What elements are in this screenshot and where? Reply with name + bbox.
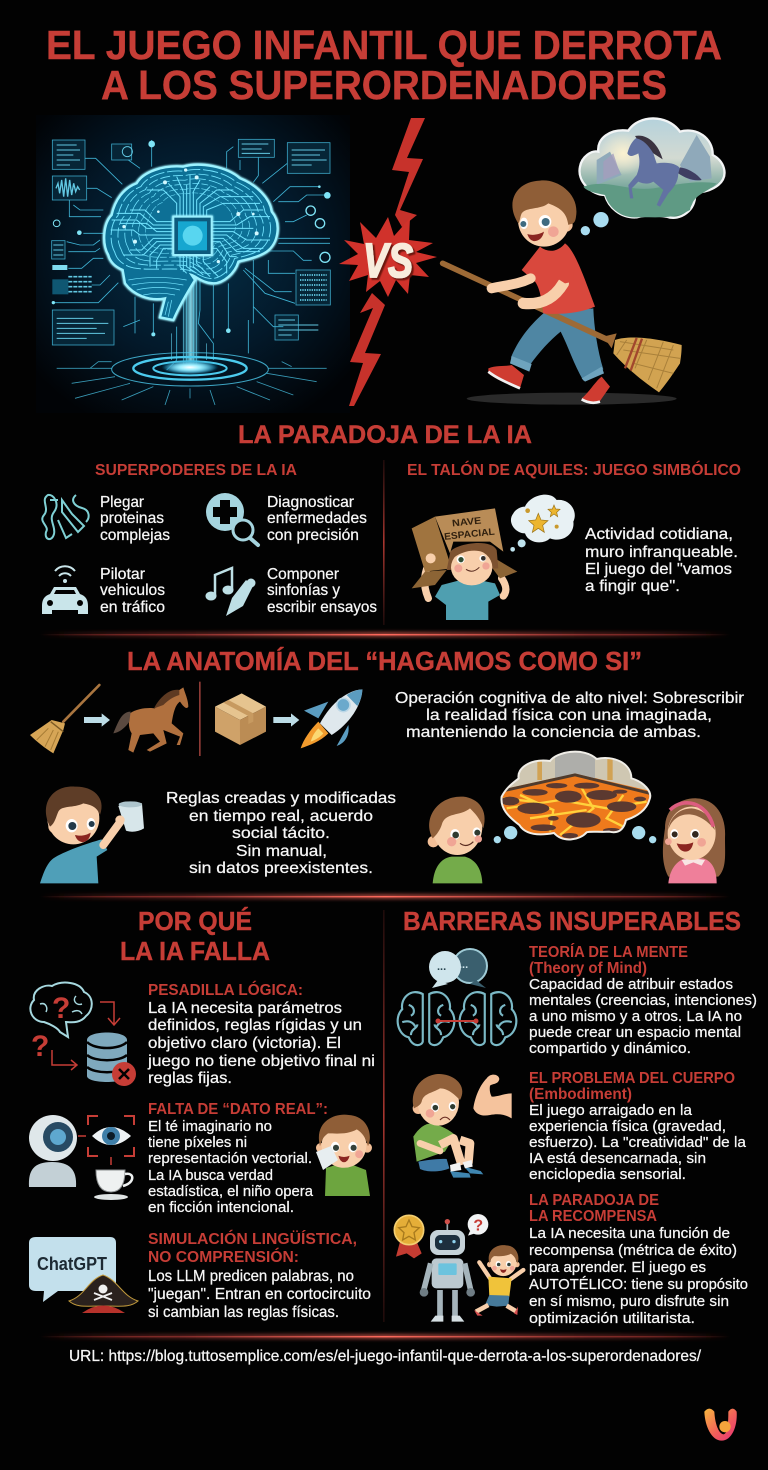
text: lack of real data: La IA busca verdad bbox=[148, 1167, 273, 1184]
text: logic nightmare: PESADILLA LÓGICA: bbox=[148, 980, 303, 999]
logo bbox=[704, 1409, 737, 1441]
text: theory of mind: (Theory of Mind) bbox=[529, 960, 647, 977]
text: diagnose: Diagnosticar bbox=[267, 494, 355, 511]
text: everyday wall bbox=[585, 526, 738, 595]
text: lack of real data: FALTA DE “DATO REAL”: bbox=[148, 1101, 328, 1118]
text: logic nightmare: definidos, reglas rígidas y un bbox=[148, 1017, 362, 1034]
icon: protein bbox=[42, 495, 89, 539]
section heading: anatomy: LA ANATOMÍA DEL “HAGAMOS COMO SI” bbox=[127, 646, 642, 676]
arms bbox=[492, 278, 531, 288]
text: body problem: IA está desencarnada, sin bbox=[529, 1150, 706, 1167]
text: body problem: experiencia física (gravedad, bbox=[529, 1118, 726, 1135]
icon: music and pen bbox=[206, 568, 255, 616]
text: body problem: enciclopedia sensorial. bbox=[529, 1166, 686, 1183]
title: A LOS SUPERORDENADORES bbox=[101, 62, 667, 108]
icon: medal bbox=[394, 1215, 424, 1258]
text: fold proteins: complejas bbox=[100, 527, 170, 544]
text: linguistic simulation: "juegan". Entran en cortocircuito bbox=[148, 1286, 371, 1303]
icon: robot bbox=[420, 1219, 475, 1322]
heading: why AI fails: LA IA FALLA bbox=[120, 936, 270, 966]
icon: flexed arm bbox=[473, 1075, 512, 1118]
broom stick bbox=[443, 263, 608, 340]
text: body problem bbox=[529, 1070, 747, 1183]
icon: ChatGPT bubble bbox=[29, 1237, 116, 1302]
text: theory of mind: mentales (creencias, intenciones) bbox=[529, 992, 757, 1009]
icon: tea cup bbox=[94, 1170, 132, 1200]
text: theory of mind bbox=[529, 942, 757, 1057]
text: compose: Componer bbox=[267, 566, 340, 583]
box label bbox=[444, 515, 495, 543]
text: body problem: El juego arraigado en la bbox=[529, 1102, 693, 1119]
icon: cardboard box bbox=[215, 693, 266, 745]
text: linguistic simulation: Los LLM predicen palabras, no bbox=[148, 1268, 354, 1285]
circuit connectors bbox=[53, 140, 330, 370]
text: linguistic simulation: SIMULACIÓN LINGÜÍSTICA, bbox=[148, 1229, 357, 1248]
text: cognitive operation: manteniendo la conciencia de ambas. bbox=[406, 724, 701, 741]
transformation icons bbox=[30, 682, 362, 756]
text: reward paradox: La IA necesita una función de bbox=[529, 1225, 730, 1242]
brain traces bbox=[111, 169, 271, 317]
text: theory of mind: compartido y dinámico. bbox=[529, 1040, 691, 1057]
icon: ChatGPT bubble: ChatGPT bbox=[37, 1254, 107, 1274]
head bbox=[512, 180, 576, 247]
icon: chat bubbles: ... bbox=[437, 961, 446, 973]
title bbox=[46, 22, 722, 108]
text: reward paradox bbox=[529, 1192, 748, 1327]
data beam bbox=[182, 277, 200, 368]
broom head bbox=[603, 333, 617, 348]
shoes bbox=[488, 365, 524, 388]
thought cloud with stars bbox=[510, 495, 575, 552]
icon: pirate hat bbox=[69, 1275, 138, 1313]
text: logic nightmare bbox=[147, 980, 375, 1087]
text: rules: Sin manual, bbox=[236, 843, 327, 860]
girl in pink bbox=[663, 798, 725, 883]
text: logic nightmare: La IA necesita parámetros bbox=[148, 1000, 342, 1017]
text: reward paradox: LA PARADOJA DE bbox=[529, 1192, 659, 1209]
jeans bbox=[511, 308, 603, 381]
text: everyday wall: a fingir que". bbox=[585, 578, 680, 595]
icon: question bubble: ? bbox=[473, 1218, 483, 1235]
text: lack of real data: representación vectorial. bbox=[148, 1150, 312, 1167]
boy riding a broom with thought cloud bbox=[443, 118, 724, 405]
embodiment and reward figures bbox=[394, 1074, 523, 1322]
panel text lines bbox=[53, 144, 327, 338]
text: lack of real data: estadística, el niño opera bbox=[148, 1183, 314, 1200]
text: rules: Reglas creadas y modificadas bbox=[166, 790, 396, 807]
text: everyday wall: Actividad cotidiana, bbox=[585, 526, 733, 543]
icon: broom bbox=[30, 685, 99, 753]
text: pilot: Pilotar bbox=[100, 566, 146, 583]
text: theory of mind: puede crear un espacio mental bbox=[529, 1024, 741, 1041]
lightning bolt bbox=[349, 118, 425, 406]
text: cognitive operation bbox=[395, 690, 745, 741]
VS badge bbox=[339, 217, 437, 297]
text: reward paradox: en sí mismo, puro disfrute sin bbox=[529, 1293, 729, 1310]
text: rules: sin datos preexistentes. bbox=[189, 860, 373, 877]
source URL: URL: https://blog.tuttosemplice.com/es/el-juego-infantil-que-derrota-a-los-superordenadores/ bbox=[69, 1348, 702, 1365]
arrow bbox=[273, 713, 299, 727]
text: reward paradox: recompensa (métrica de éxito) bbox=[529, 1242, 737, 1259]
text: body problem: (Embodiment) bbox=[529, 1086, 632, 1103]
red shirt bbox=[522, 243, 595, 314]
text: theory of mind: TEORÍA DE LA MENTE bbox=[529, 942, 688, 961]
heading: achilles heel: EL TALÓN DE AQUILES: JUEGO SIMBÓLICO bbox=[407, 460, 741, 479]
heading: why AI fails bbox=[120, 906, 270, 966]
text: diagnose: enfermedades bbox=[267, 510, 367, 527]
brain bbox=[104, 165, 278, 320]
text: pilot: en tráfico bbox=[100, 599, 165, 616]
text: theory of mind: a uno mismo y a otros. La IA no bbox=[529, 1008, 742, 1025]
box label: ESPACIAL bbox=[444, 527, 495, 543]
boy in green bbox=[428, 797, 485, 883]
text: body problem: esfuerzo). La "creatividad" de la bbox=[529, 1134, 747, 1151]
lava cloud bbox=[494, 745, 656, 845]
horse bbox=[627, 136, 702, 207]
text: diagnose bbox=[267, 494, 367, 544]
arrow bbox=[84, 713, 110, 727]
icon: brain, database and error bbox=[30, 983, 136, 1086]
icon: medical magnifier bbox=[206, 493, 258, 545]
VS badge: VS bbox=[363, 235, 413, 288]
text: everyday wall: El juego del "vamos bbox=[585, 561, 732, 578]
text: reward paradox: LA RECOMPENSA bbox=[529, 1208, 657, 1225]
text: reward paradox: optimización utilitarista. bbox=[529, 1310, 695, 1327]
text: linguistic simulation: si cambian las reglas físicas. bbox=[148, 1304, 339, 1321]
heading: superpowers: SUPERPODERES DE LA IA bbox=[95, 462, 297, 479]
text: fold proteins bbox=[100, 494, 170, 544]
text: cognitive operation: la realidad física con una imaginada, bbox=[426, 707, 712, 724]
heading: insurmountable barriers: BARRERAS INSUPERABLES bbox=[403, 906, 741, 936]
text: theory of mind: Capacidad de atribuir estados bbox=[529, 976, 733, 993]
chip bbox=[173, 217, 212, 255]
boy drinking bbox=[316, 1115, 372, 1196]
text: compose bbox=[267, 566, 377, 616]
text: lack of real data: tiene píxeles ni bbox=[148, 1134, 247, 1151]
text: rules bbox=[166, 790, 396, 877]
text: compose: sinfonías y bbox=[267, 582, 340, 599]
box label: NAVE bbox=[452, 515, 483, 529]
text: fold proteins: proteinas bbox=[100, 510, 164, 527]
sad boy sitting bbox=[413, 1074, 483, 1178]
icon: two brains bbox=[398, 992, 516, 1045]
text: pilot: vehiculos bbox=[100, 582, 165, 599]
child with cardboard box bbox=[412, 508, 517, 620]
icon: chat bubbles bbox=[429, 949, 487, 988]
icon: brain, database and error: ? bbox=[52, 992, 70, 1025]
icon: question bubble bbox=[468, 1214, 488, 1236]
text: body problem: EL PROBLEMA DEL CUERPO bbox=[529, 1070, 735, 1087]
icon: robot and eye bbox=[29, 1115, 134, 1187]
text: lack of real data: El té imaginario no bbox=[148, 1118, 272, 1135]
ground shadow bbox=[467, 393, 677, 405]
icon: horse bbox=[113, 687, 188, 753]
text: reward paradox: AUTOTÉLICO: tiene su propósito bbox=[529, 1276, 748, 1293]
text: logic nightmare: objetivo claro (victoria). El bbox=[148, 1035, 341, 1052]
hologram base bbox=[57, 353, 327, 405]
text: logic nightmare: juego no tiene objetivo final ni bbox=[147, 1053, 375, 1070]
text: everyday wall: muro infranqueable. bbox=[585, 544, 738, 561]
title: EL JUEGO INFANTIL QUE DERROTA bbox=[46, 22, 722, 68]
text: rules: social tácito. bbox=[232, 825, 330, 842]
text: pilot bbox=[100, 566, 165, 616]
text: linguistic simulation: NO COMPRENSIÓN: bbox=[148, 1247, 299, 1266]
text: lack of real data bbox=[148, 1101, 328, 1216]
text: rules: en tiempo real, acuerdo bbox=[189, 808, 373, 825]
text: compose: escribir ensayos bbox=[267, 599, 377, 616]
text: reward paradox: para aprender. El juego es bbox=[529, 1259, 706, 1276]
thought cloud with horse bbox=[580, 118, 724, 235]
heading: why AI fails: POR QUÉ bbox=[138, 906, 252, 936]
panel: AI circuit brain bbox=[36, 115, 350, 413]
section heading: paradox: LA PARADOJA DE LA IA bbox=[238, 421, 532, 449]
boy with cup bbox=[40, 787, 144, 883]
icon: rocket bbox=[301, 689, 362, 748]
text: fold proteins: Plegar bbox=[100, 494, 145, 511]
text: lack of real data: en ficción intencional. bbox=[148, 1199, 294, 1216]
lava thought scene bbox=[428, 745, 725, 883]
text: diagnose: con precisión bbox=[267, 527, 359, 544]
text: linguistic simulation bbox=[148, 1229, 371, 1321]
icon: car bbox=[42, 566, 88, 614]
text: logic nightmare: reglas fijas. bbox=[148, 1070, 232, 1087]
text: cognitive operation: Operación cognitiva de alto nivel: Sobrescribir bbox=[395, 690, 745, 707]
data panels bbox=[52, 139, 330, 345]
icon: chat bubbles: ... bbox=[459, 959, 468, 971]
happy jumping kid bbox=[474, 1245, 523, 1316]
icon: brain, database and error: ? bbox=[31, 1030, 49, 1063]
